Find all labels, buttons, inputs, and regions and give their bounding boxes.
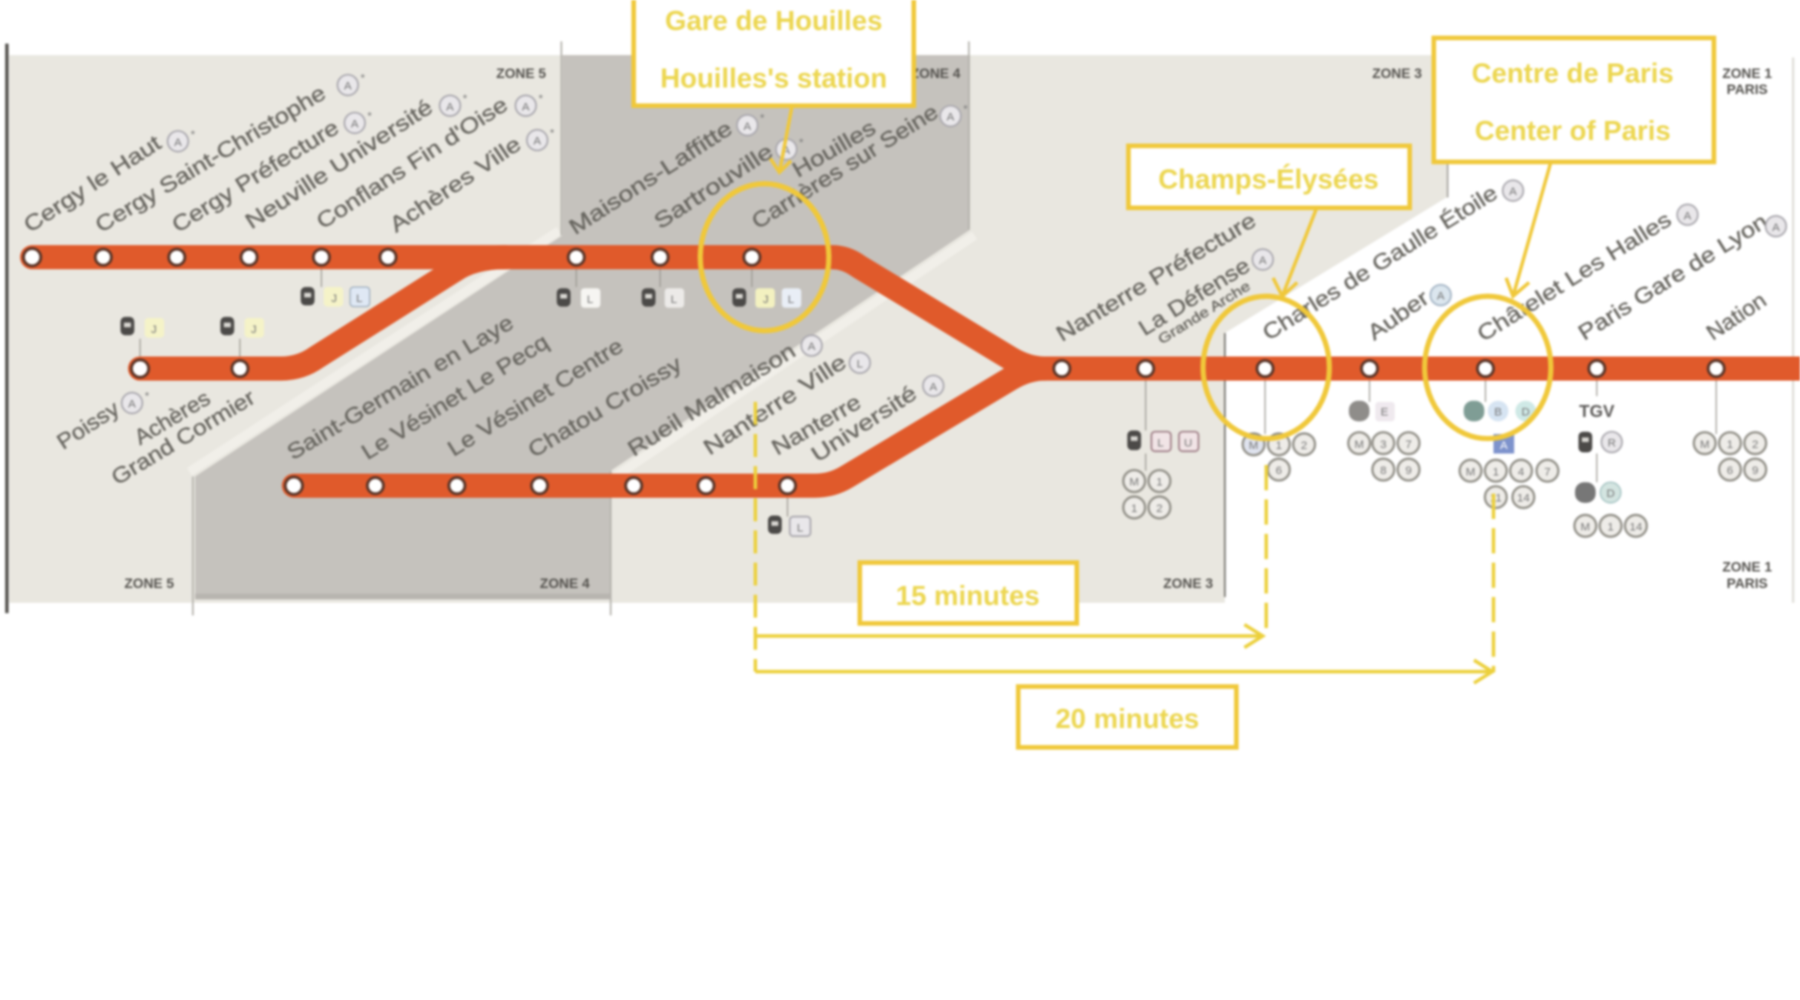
icons: correspondences, Paris Gare de Lyon: D: [1606, 488, 1615, 500]
icons: correspondences, Nanterre Préfecture: 1: [1131, 503, 1137, 515]
icons: train and line badges, suburban stations: L: [587, 294, 593, 306]
RER A badges next to station names: L: [857, 358, 863, 370]
icons: correspondences, Nation: 6: [1727, 465, 1733, 477]
station names: Grand Cormier: [107, 385, 259, 490]
icons: correspondences, Paris Gare de Lyon: 14: [1629, 521, 1643, 533]
station names: Grande Arche: [1155, 278, 1253, 347]
station names: Achères Ville: [385, 131, 525, 237]
icons: correspondences, Nanterre Préfecture: 2: [1156, 503, 1163, 515]
station names: [19, 80, 1772, 490]
RER A badges next to station names: A: [743, 121, 751, 133]
icons: correspondences, Nanterre Préfecture: 1: [1156, 477, 1163, 489]
station names: Auber: [1363, 285, 1433, 345]
icons: train and line badges, suburban stations: L: [788, 294, 794, 306]
RER A badges next to station names: A: [1437, 291, 1445, 303]
zone labels: ZONE 4: [911, 66, 961, 81]
station names: Charles de Gaulle Étoile: [1258, 180, 1502, 345]
icons: train and line badges, suburban stations: J: [331, 293, 337, 305]
highlight circle: Houilles: [700, 184, 829, 331]
zone labels: ZONE 5: [496, 66, 546, 81]
zone labels: ZONE 4: [540, 576, 590, 591]
arrow: Champs-Élysées callout to circle: [1273, 208, 1317, 296]
station names: Nation: [1702, 287, 1771, 345]
station names: Houilles: [788, 115, 880, 182]
icons: correspondences, Paris Gare de Lyon: R: [1608, 438, 1616, 450]
zone labels: PARIS: [1727, 576, 1768, 591]
icons: correspondences, Nanterre Préfecture: M: [1129, 477, 1139, 489]
RER A badges next to station names: *: [367, 110, 372, 122]
RER A badges next to station names: A: [344, 81, 352, 93]
RER A badges next to station names: *: [538, 93, 543, 105]
icons: correspondences, Nanterre Préfecture: U: [1184, 438, 1192, 450]
panel: fare zones background: [7, 41, 1793, 615]
icons: correspondences, Châtelet Les Halles: B: [1494, 407, 1502, 419]
callout: 15 minutes: [860, 563, 1077, 623]
callout: Centre de Paris: Center of Paris: [1475, 115, 1671, 146]
stations: [24, 249, 1724, 494]
callout: Centre de Paris: [1434, 38, 1714, 162]
zone labels: ZONE 5: [124, 576, 174, 591]
RER A badges next to station names: A: [808, 341, 816, 353]
icons: correspondences, Charles de Gaulle Étoile: 6: [1276, 465, 1282, 477]
RER A badges next to station names: *: [191, 129, 196, 141]
icons: correspondences, Paris Gare de Lyon: 1: [1607, 521, 1614, 533]
route arrow: 15 minutes to Champs-Élysées: [755, 402, 1266, 672]
RER A badges next to station names: A: [522, 101, 530, 113]
station names: Châtelet Les Halles: [1473, 207, 1676, 346]
RER A badges next to station names: A: [174, 137, 182, 149]
RER A badges next to station names: A: [1772, 222, 1780, 234]
icons: train and line badges, suburban stations: L: [671, 294, 677, 306]
station names: Poissy: [52, 396, 124, 454]
icons: correspondences, Paris Gare de Lyon: M: [1581, 521, 1590, 533]
icons: correspondences, Auber: 7: [1405, 439, 1412, 451]
callout: 15 minutes: 15 minutes: [896, 580, 1040, 611]
station names: Le Vésinet Centre: [443, 333, 627, 461]
zone labels: ZONE 3: [1372, 66, 1422, 81]
highlight circle: Charles de Gaulle Étoile: [1203, 296, 1329, 439]
station names: Nanterre Ville: [699, 349, 851, 460]
icons: correspondences, Nanterre Préfecture: L: [1157, 438, 1164, 450]
RER A line: [32, 257, 1800, 486]
zone labels: ZONE 3: [1163, 576, 1213, 591]
station names: Sartrouville: [649, 138, 777, 234]
RER A badges next to station names: *: [799, 137, 804, 149]
station names: Cergy Préfecture: [167, 115, 343, 237]
icons: train and line badges, suburban stations: J: [763, 294, 769, 306]
station names: Paris Gare de Lyon: [1574, 208, 1772, 345]
callout: 20 minutes: 20 minutes: [1055, 703, 1199, 734]
zone labels: ZONE 1: [1722, 66, 1772, 81]
icons: correspondences, Charles de Gaulle Étoile: [1243, 433, 1315, 480]
RER A badges next to station names: A: [1259, 255, 1267, 267]
icons: correspondences, Charles de Gaulle Étoile: 2: [1301, 440, 1307, 452]
RER A badges next to station names: A: [446, 101, 454, 113]
icons: correspondences, Nation: M: [1700, 439, 1710, 451]
icons: correspondences, Auber: [1348, 401, 1419, 480]
zone labels: ZONE 1: [1722, 560, 1772, 575]
icons: train and line badges, suburban stations: [121, 287, 810, 536]
callout: Gare de Houilles: [634, 0, 914, 106]
icons: train and line badges, suburban stations: L: [356, 293, 363, 305]
icons: correspondences, Paris Gare de Lyon: TGV: [1579, 401, 1615, 421]
callout: Champs-Élysées: Champs-Élysées: [1158, 163, 1379, 194]
RER A badges next to station names: A: [1509, 186, 1517, 198]
icons: correspondences, Auber: 9: [1405, 465, 1412, 477]
arrow: Centre de Paris callout to circle: [1506, 162, 1551, 296]
icons: correspondences, Auber: 3: [1380, 439, 1386, 451]
RER A badges next to station names: A: [128, 399, 136, 411]
RER A badges next to station names: A: [929, 381, 937, 393]
icons: train and line badges, suburban stations: J: [151, 324, 157, 336]
connector lines from stations to correspondences: [140, 257, 1716, 517]
station names: Conflans Fin d'Oise: [312, 92, 512, 234]
station names: Le Vésinet Le Pecq: [357, 329, 553, 465]
arrow: Gare de Houilles callout to circle: [770, 106, 792, 172]
RER A badges next to station names: *: [463, 93, 468, 105]
icons: correspondences, Châtelet Les Halles: M: [1466, 466, 1475, 478]
station names: Université: [806, 380, 921, 467]
RER A badges next to station names: A: [947, 112, 955, 124]
RER A badges next to station names: *: [361, 73, 366, 85]
zone labels: [124, 66, 1772, 591]
station names: Cergy le Haut: [19, 130, 165, 237]
icons: train and line badges, suburban stations: J: [251, 324, 257, 336]
icons: correspondences, Châtelet Les Halles: [1460, 401, 1558, 508]
RER A badges next to station names: A: [783, 145, 791, 157]
RER A badges next to station names: *: [145, 391, 150, 403]
icons: correspondences, Charles de Gaulle Étoile: M: [1249, 440, 1258, 452]
route arrow: 20 minutes to Châtelet: [755, 494, 1493, 683]
callout: 20 minutes: [1018, 687, 1236, 747]
icons: correspondences, Châtelet Les Halles: A: [1500, 440, 1508, 452]
station names: Rueil Malmaison: [623, 338, 800, 461]
icons: correspondences, Paris Gare de Lyon: [1574, 401, 1647, 537]
station names: Maisons-Laffitte: [564, 115, 737, 240]
station names: La Défense: [1134, 253, 1254, 341]
icons: correspondences, Nanterre Préfecture: [1123, 431, 1198, 518]
callout: Champs-Élysées: [1128, 146, 1410, 208]
RER A badges next to station names: *: [760, 113, 765, 125]
RER A badges next to station names: A: [351, 118, 359, 130]
icons: correspondences, Châtelet Les Halles: 7: [1544, 466, 1551, 478]
station names: Neuville Université: [241, 94, 437, 234]
icons: correspondences, Châtelet Les Halles: 14: [1517, 493, 1530, 505]
zone labels: PARIS: [1727, 82, 1768, 97]
icons: train and line badges, suburban stations: L: [797, 523, 803, 535]
callout: Gare de Houilles: Houilles's station: [660, 62, 887, 93]
icons: correspondences, Châtelet Les Halles: 11: [1490, 493, 1502, 505]
icons: correspondences, Auber: 8: [1380, 465, 1386, 477]
station names: Achères: [130, 385, 215, 450]
icons: correspondences, Nation: 1: [1727, 439, 1733, 451]
icons: correspondences, Nation: [1694, 432, 1766, 480]
RER A badges next to station names: *: [963, 104, 968, 116]
station names: Nanterre Préfecture: [1052, 207, 1260, 346]
RER A badges next to station names: *: [550, 128, 555, 140]
station names: Carrières sur Seine: [747, 99, 942, 234]
RER A badges next to station names: A: [533, 136, 541, 148]
icons: correspondences, Châtelet Les Halles: 4: [1518, 466, 1525, 478]
callout: Gare de Houilles: Gare de Houilles: [665, 5, 882, 36]
RER A badges next to station names: A: [1684, 210, 1692, 222]
icons: correspondences, Nation: 2: [1752, 439, 1758, 451]
station names: Chatou Croissy: [524, 351, 686, 462]
icons: correspondences, Charles de Gaulle Étoile: 1: [1276, 440, 1282, 452]
highlight circle: Châtelet Les Halles: [1425, 296, 1551, 439]
icons: correspondences, Nation: 9: [1752, 465, 1758, 477]
station names: Nanterre: [767, 389, 865, 460]
station names: Cergy Saint-Christophe: [91, 80, 330, 237]
icons: correspondences, Châtelet Les Halles: 1: [1493, 466, 1499, 478]
callout: Centre de Paris: Centre de Paris: [1472, 58, 1674, 89]
RER A badges next to station names: [122, 73, 1786, 413]
icons: correspondences, Auber: E: [1381, 407, 1389, 419]
station names: Saint-Germain en Laye: [282, 310, 518, 465]
icons: correspondences, Auber: M: [1354, 439, 1364, 451]
icons: correspondences, Châtelet Les Halles: D: [1521, 407, 1530, 419]
